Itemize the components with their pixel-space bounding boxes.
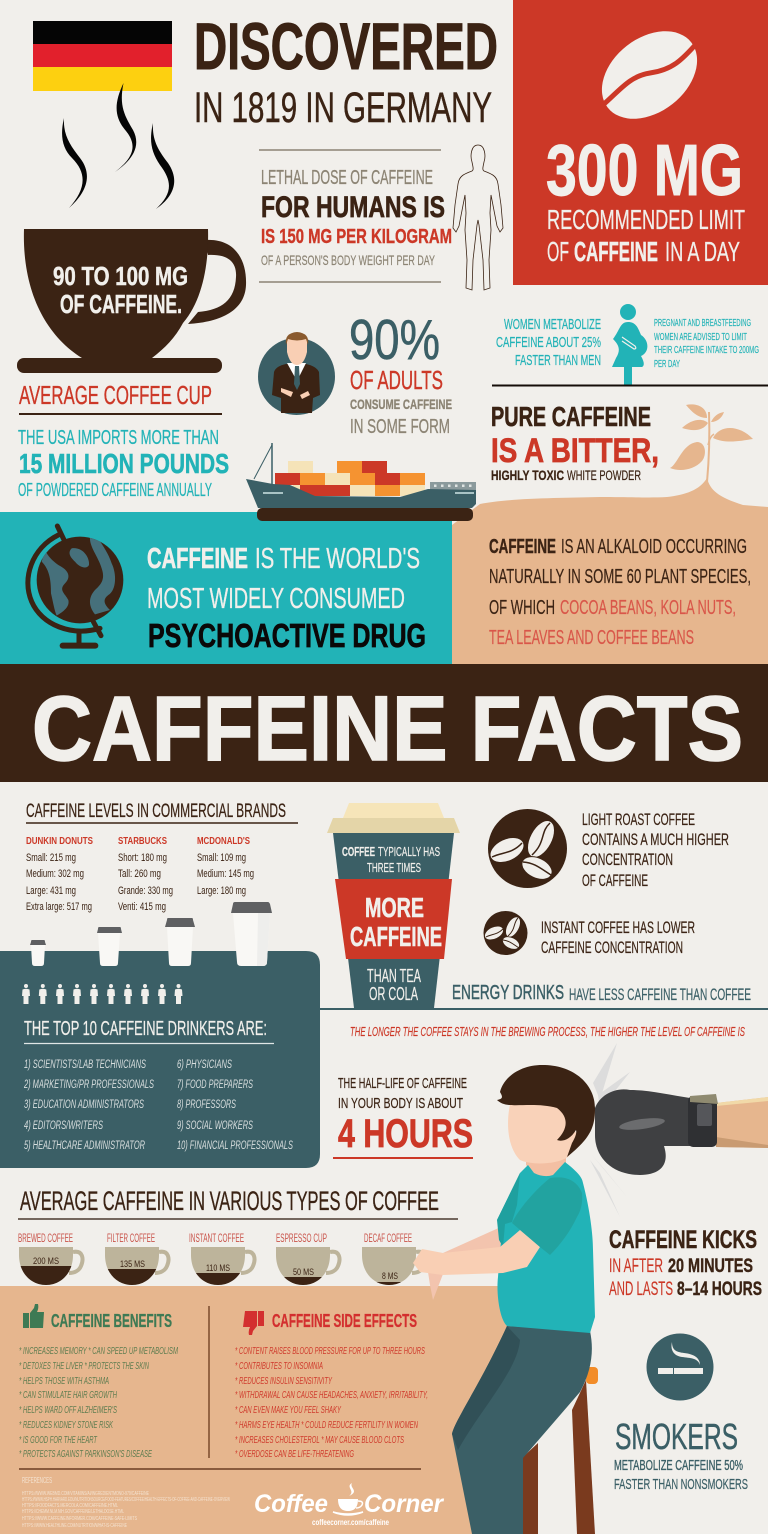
list: drinkers: 2) MARKETING/PR PROFESSIONALS: [23, 1079, 154, 1091]
table: starbucks: STARBUCKS: [118, 835, 167, 847]
list: side effects: * INCREASES CHOLESTEROL * MAY CAUSE BLOOD CLOTS: [235, 1435, 404, 1446]
text block: caffeine kicks: AND LASTS: [609, 1278, 673, 1300]
cup text: MORE: [365, 892, 424, 923]
panel: top 10 drinkers: [0, 902, 320, 1168]
text block: half-life: [333, 1075, 473, 1158]
cup: espresso: ESPRESSO CUP: [276, 1231, 327, 1245]
list: drinkers: 8) PROFESSORS: [177, 1099, 236, 1111]
icon: coffee cup: [17, 229, 246, 373]
text block: psychoactive drug: [147, 543, 426, 654]
cup: decaf: 8 MS: [382, 1271, 398, 1282]
icon: pregnant woman: [612, 304, 647, 385]
table: mcdonalds: MCDONALD'S: [197, 835, 250, 847]
text block: lethal dose: OF A PERSON'S BODY WEIGHT PER DAY: [261, 252, 435, 268]
cup text: OF CAFFEINE.: [60, 291, 182, 319]
icon: globe: [28, 526, 123, 649]
text block: light roast: OF CAFFEINE: [582, 872, 648, 890]
references: HTTPS://WWW.HEALTHLINE.COM/NUTRITION/WHAT-IS-CAFFEINE: [22, 1523, 127, 1529]
benefits heading: CAFFEINE BENEFITS: [51, 1311, 172, 1331]
cup: brewed: 200 MS: [33, 1256, 59, 1267]
list: drinkers: 6) PHYSICIANS: [177, 1059, 232, 1071]
cup: espresso: [276, 1231, 339, 1286]
text block: pure caffeine: PURE CAFFEINE: [491, 401, 651, 432]
cup: brewed: [18, 1231, 82, 1286]
table: mcdonalds: Medium: 145 mg: [197, 868, 254, 880]
text block: 90 percent of adults: IN SOME FORM: [350, 415, 450, 438]
list: drinkers: 5) HEALTHCARE ADMINISTRATOR: [24, 1140, 145, 1152]
icon: german flag: [33, 21, 172, 91]
text block: pregnant advice: PER DAY: [654, 359, 680, 370]
text block: alkaloid: [489, 535, 751, 649]
references: HTTPS://WWW.CAFFEINEINFORMER.COM/CAFFEINE-SAFE-LIMITS: [22, 1516, 137, 1522]
text block: pure caffeine: HIGHLY TOXIC: [491, 467, 564, 483]
cup: instant: INSTANT COFFEE: [189, 1231, 244, 1245]
icon: beans circle small: [482, 911, 528, 955]
logo: coffee corner: [254, 1483, 444, 1527]
text block: smokers: [614, 1416, 748, 1493]
logo: coffee corner: Coffee: [254, 1490, 328, 1518]
arm and hand: [413, 1230, 540, 1275]
boxing arm: [716, 1097, 768, 1148]
text block: lethal dose: [259, 150, 452, 282]
list: drinkers: 3) EDUCATION ADMINISTRATORS: [24, 1099, 144, 1111]
text block: half-life: IN YOUR BODY IS ABOUT: [338, 1095, 463, 1112]
list: drinkers: 9) SOCIAL WORKERS: [177, 1120, 253, 1132]
title band: [0, 664, 768, 782]
text block: usa imports: THE USA IMPORTS MORE THAN: [18, 426, 219, 449]
icon: beans circle large: [486, 809, 567, 888]
cup: brewed: BREWED COFFEE: [18, 1231, 73, 1245]
icon: cigarette: [646, 1334, 714, 1400]
text block: light roast: [582, 811, 729, 890]
text block: caffeine kicks: IN AFTER: [609, 1255, 663, 1277]
limit caption: [547, 204, 745, 267]
impact marks: [590, 1043, 630, 1217]
heading: discovered: [194, 9, 498, 132]
list: drinkers: 7) FOOD PREPARERS: [177, 1079, 253, 1091]
list: drinkers: 10) FINANCIAL PROFESSIONALS: [177, 1140, 293, 1152]
cup: instant: [189, 1231, 254, 1286]
list: side effects: [235, 1346, 428, 1460]
side effects heading: CAFFEINE SIDE EFFECTS: [272, 1311, 417, 1331]
list: benefits: * IS GOOD FOR THE HEART: [19, 1435, 98, 1446]
references: HTTPS://WWW.WEBMD.COM/VITAMINS/AI/INGREDIENTMONO-979/CAFFEINE: [22, 1491, 149, 1497]
hair: [497, 1065, 595, 1157]
list: drinkers: 1) SCIENTISTS/LAB TECHNICIANS: [24, 1059, 146, 1071]
cup text: OR COLA: [369, 983, 418, 1004]
cup: espresso: 50 MS: [293, 1267, 314, 1278]
table: starbucks: Tall: 260 mg: [118, 868, 161, 880]
cup text: 90 TO 100 MG: [53, 263, 188, 291]
icon: human outline: [453, 145, 503, 290]
list: side effects: * HARMS EYE HEALTH * COULD REDUCE FERTILITY IN WOMEN: [235, 1420, 418, 1431]
cup text: THAN TEA: [367, 965, 421, 986]
list: benefits: * HELPS THOSE WITH ASTHMA: [19, 1376, 109, 1387]
text block: instant coffee: CAFFEINE CONCENTRATION: [541, 939, 683, 957]
limit caption: OF: [547, 236, 569, 267]
logo: coffee corner: coffeecorner.com/caffeine: [312, 1518, 389, 1527]
list: drinkers: 4) EDITORS/WRITERS: [24, 1120, 103, 1132]
text block: lethal dose: IS 150 MG PER KILOGRAM: [261, 226, 452, 248]
list: side effects: * WITHDRAWAL CAN CAUSE HEADACHES, ANXIETY, IRRITABILITY,: [235, 1390, 428, 1401]
table: dunkin donuts: Medium: 302 mg: [26, 868, 84, 880]
text block: light roast: LIGHT ROAST COFFEE: [582, 811, 695, 829]
text block: alkaloid: OF WHICH: [489, 596, 555, 619]
list: benefits: * CAN STIMULATE HAIR GROWTH: [19, 1390, 117, 1401]
list: benefits: [19, 1346, 178, 1460]
face: [508, 1104, 577, 1163]
table: dunkin donuts: DUNKIN DONUTS: [26, 835, 93, 847]
text block: lethal dose: FOR HUMANS IS: [261, 191, 445, 224]
sleeve: [512, 1177, 582, 1255]
table: starbucks: [118, 835, 173, 913]
references: HTTPS://CHEMM.NLM.NIH.GOV/CAFFEINE/LETHALDOSE.HTML: [22, 1509, 124, 1515]
table: dunkin donuts: [26, 835, 93, 913]
cup text: COFFEE: [342, 844, 375, 859]
text block: 90 percent of adults: 90%: [349, 308, 440, 372]
heading: discovered: DISCOVERED: [194, 9, 498, 83]
cup text: TYPICALLY HAS: [378, 844, 440, 859]
icon: large to-go cup: [327, 803, 460, 1008]
text block: energy drinks: ENERGY DRINKS: [452, 981, 564, 1004]
pants: [452, 1326, 592, 1534]
logo: coffee corner: Corner: [364, 1490, 444, 1518]
table: starbucks: Grande: 330 mg: [118, 885, 173, 897]
text block: women metabolize: WOMEN METABOLIZE: [504, 317, 601, 333]
table: mcdonalds: Large: 180 mg: [197, 885, 246, 897]
references: HTTPS://WWW.HSPH.HARVARD.EDU/NUTRITIONSOURCE/FOOD-FEATURES/COFFEE/HEALTH-EFFECTS-OF-COFFEE-AND-CAFFEINE-OVERVIEW: [22, 1497, 230, 1503]
limit caption: CAFFEINE: [574, 236, 658, 267]
panel: 300 mg limit: [513, 0, 768, 285]
icon: businessman: [258, 332, 335, 415]
list: side effects: * CONTENT RAISES BLOOD PRESSURE FOR UP TO THREE HOURS: [235, 1346, 425, 1357]
icon: thumbs up: [23, 1304, 44, 1328]
cup: filter: [105, 1231, 168, 1286]
cup: decaf: DECAF COFFEE: [364, 1231, 412, 1245]
heading: average caffeine: AVERAGE CAFFEINE IN VARIOUS TYPES OF COFFEE: [20, 1186, 439, 1216]
shirt: [497, 1162, 595, 1333]
references: HTTPS://FOODFACTS.MERCOLA.COM/CAFFEINE.HTML: [22, 1503, 118, 1509]
cup: filter: FILTER COFFEE: [107, 1231, 155, 1245]
text block: half-life: 4 HOURS: [338, 1112, 473, 1156]
text block: light roast: CONCENTRATION: [582, 851, 673, 869]
text block: lethal dose: LETHAL DOSE OF CAFFEINE: [261, 166, 433, 189]
list: drinkers: [23, 1059, 293, 1152]
icon: row of people: [22, 984, 182, 1004]
hidden arm: [428, 1226, 505, 1300]
chart: coffee cups: [18, 1231, 425, 1286]
text block: caffeine kicks: [609, 1226, 762, 1300]
containers: [275, 461, 425, 496]
panel: tan ground and alkaloid: [452, 478, 768, 664]
cup: decaf: [362, 1234, 422, 1285]
illustration: man punched by glove: [413, 1043, 768, 1534]
table: mcdonalds: Small: 109 mg: [197, 852, 246, 864]
icon: coffee bean: [585, 13, 714, 137]
cup text: THREE TIMES: [367, 860, 421, 875]
text block: 90 percent of adults: [349, 308, 452, 438]
list: side effects: * CONTRIBUTES TO INSOMNIA: [235, 1361, 323, 1372]
text block: women metabolize: [496, 317, 601, 369]
heading: commercial brands: CAFFEINE LEVELS IN COMMERCIAL BRANDS: [26, 800, 286, 822]
text block: psychoactive drug: IS THE WORLD'S: [255, 543, 420, 575]
icon: container ship: [246, 443, 476, 521]
stool: [523, 1367, 598, 1534]
text block: 90 percent of adults: CONSUME CAFFEINE: [350, 396, 452, 412]
text block: psychoactive drug: PSYCHOACTIVE DRUG: [148, 617, 426, 654]
text block: usa imports: 15 MILLION POUNDS: [19, 448, 229, 479]
table: mcdonalds: [197, 835, 254, 897]
list: benefits: * DETOXES THE LIVER * PROTECTS THE SKIN: [19, 1361, 149, 1372]
cup text: [342, 844, 442, 1004]
text block: women metabolize: CAFFEINE ABOUT 25%: [496, 335, 601, 351]
neck: [526, 1158, 566, 1177]
list: benefits: * REDUCES KIDNEY STONE RISK: [19, 1420, 114, 1431]
list: benefits: * PROTECTS AGAINST PARKINSON'S DISEASE: [19, 1449, 152, 1460]
text block: alkaloid: CAFFEINE: [489, 535, 556, 558]
table: dunkin donuts: Small: 215 mg: [26, 852, 76, 864]
list: benefits: * INCREASES MEMORY * CAN SPEED UP METABOLISM: [19, 1346, 178, 1357]
text block: energy drinks: [452, 981, 751, 1004]
text block: half-life: THE HALF-LIFE OF CAFFEINE: [338, 1075, 467, 1092]
label: average coffee cup: AVERAGE COFFEE CUP: [19, 380, 212, 410]
table: dunkin donuts: Large: 431 mg: [26, 885, 76, 897]
text block: instant coffee: [541, 919, 695, 957]
panel: teal band: [0, 512, 452, 664]
text block: psychoactive drug: MOST WIDELY CONSUMED: [147, 583, 405, 615]
text block: pure caffeine: IS A BITTER,: [491, 432, 659, 470]
list: side effects: * CAN EVEN MAKE YOU FEEL SHAKY: [235, 1405, 342, 1416]
icon: takeaway cups: [30, 902, 272, 966]
panel heading: THE TOP 10 CAFFEINE DRINKERS ARE:: [24, 1017, 267, 1040]
icon: thumbs down: [243, 1311, 264, 1335]
table: starbucks: Venti: 415 mg: [118, 901, 166, 913]
text block: pregnant advice: [654, 318, 759, 370]
text block: usa imports: OF POWDERED CAFFEINE ANNUALLY: [18, 480, 212, 500]
cup: instant: 110 MS: [206, 1263, 230, 1274]
text block: 90 percent of adults: OF ADULTS: [350, 365, 443, 395]
list: benefits: * HELPS WARD OFF ALZHEIMER'S: [19, 1405, 117, 1416]
table: starbucks: Short: 180 mg: [118, 852, 167, 864]
cup text: [53, 263, 188, 319]
text block: pure caffeine: WHITE POWDER: [567, 467, 641, 483]
references: [22, 1476, 230, 1529]
cup text: CAFFEINE: [350, 921, 442, 952]
references: REFERENCES: [22, 1476, 52, 1485]
text block: usa imports: [18, 426, 229, 500]
icon: steam: [62, 83, 174, 209]
icon: plant: [670, 404, 753, 482]
text block: psychoactive drug: CAFFEINE: [147, 543, 248, 575]
text block: pure caffeine: [491, 401, 659, 483]
heading: discovered: IN 1819 IN GERMANY: [194, 84, 492, 132]
list: side effects: * REDUCES INSULIN SENSITIVITY: [235, 1376, 333, 1387]
list: side effects: * OVERDOSE CAN BE LIFE-THREATENING: [235, 1449, 354, 1460]
cup: filter: 135 MS: [120, 1259, 145, 1270]
text block: women metabolize: FASTER THAN MEN: [515, 353, 601, 369]
table: dunkin donuts: Extra large: 517 mg: [26, 901, 92, 913]
boxing glove: [595, 1089, 718, 1175]
panel: benefits and side effects: [0, 1286, 510, 1534]
